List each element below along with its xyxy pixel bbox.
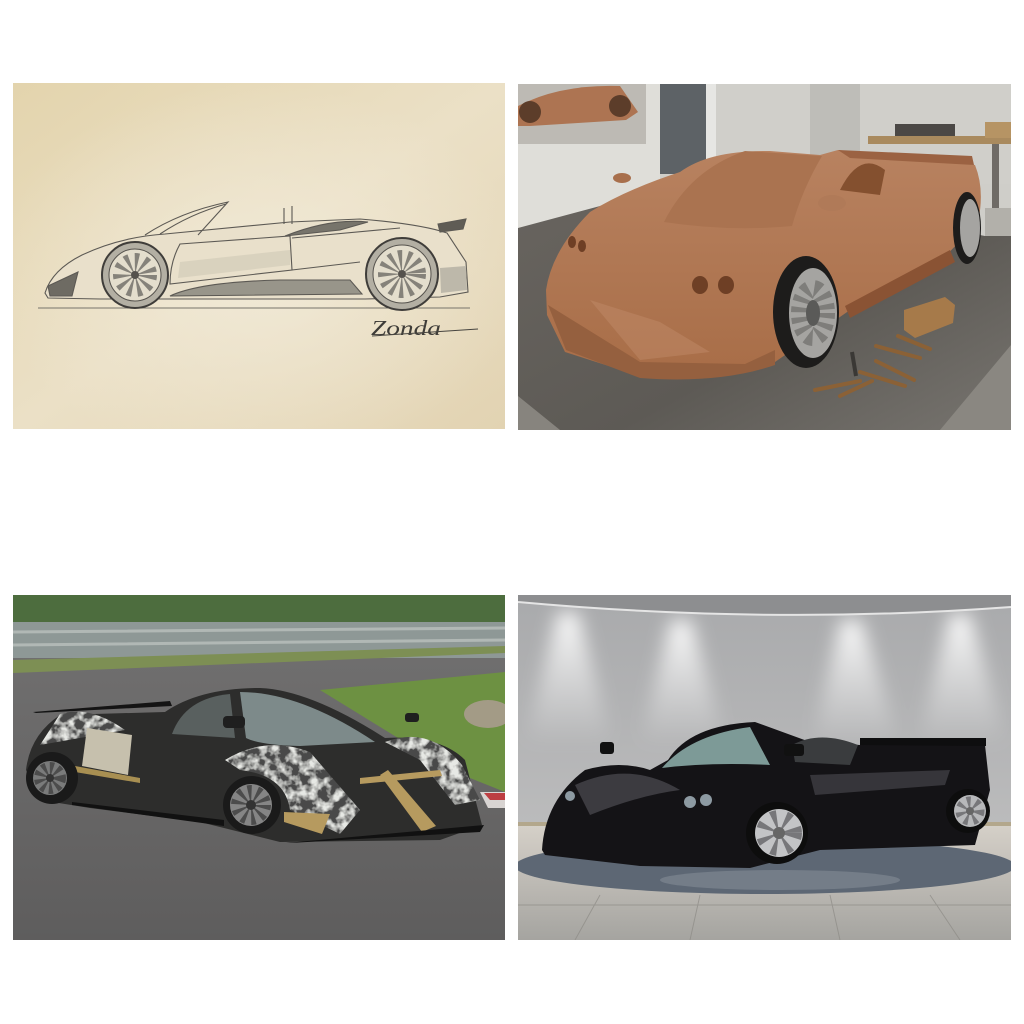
clay model wheels (773, 192, 981, 368)
signature: Zonda (371, 316, 441, 340)
panel: pencil sketch on aged paper (13, 83, 505, 429)
ceiling (518, 595, 1011, 615)
guard rail (13, 622, 505, 658)
camouflaged car (26, 688, 484, 843)
black car (542, 722, 990, 868)
grass bank (13, 595, 505, 622)
sketch wheels (102, 238, 438, 310)
studio floor (518, 160, 1011, 430)
clay car (546, 150, 981, 379)
panel: finished car in showroom (515, 595, 1015, 940)
sketch car body (38, 202, 470, 308)
turntable (518, 846, 1011, 894)
workbench (868, 136, 1011, 144)
panel: camouflaged prototype on track (13, 595, 512, 940)
panel: clay model in studio (518, 84, 1011, 430)
spotlights (533, 606, 997, 730)
framed clay photo (518, 84, 646, 144)
grass strip (13, 646, 505, 673)
studio back wall (518, 84, 660, 229)
infield grass (320, 672, 505, 792)
sculpting tools and box (815, 297, 955, 396)
showroom floor (518, 825, 1011, 940)
